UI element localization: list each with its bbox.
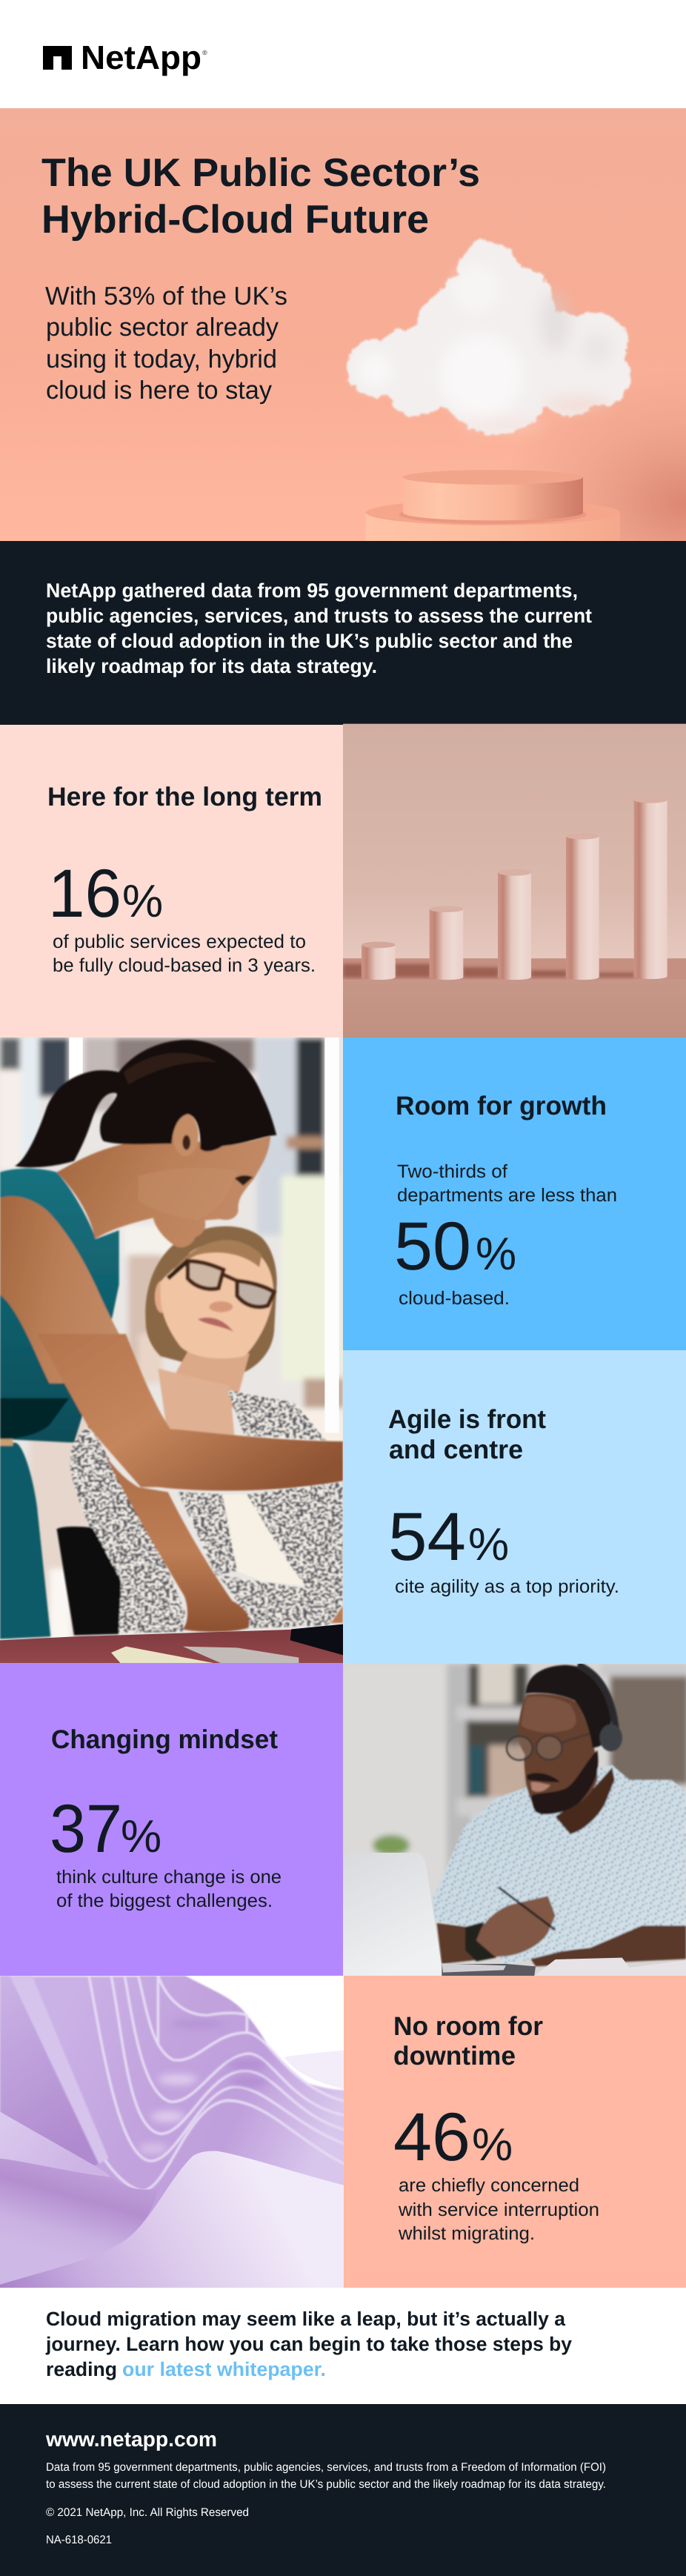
- stat: 37%: 37: [50, 1791, 122, 1867]
- stat: 50%: 50: [394, 1209, 471, 1284]
- stat: 16%: [48, 856, 163, 932]
- intro text: NetApp gathered data from 95 government departments,: [46, 580, 578, 602]
- title: Hybrid-Cloud Future: [41, 198, 429, 242]
- lead-in text: Two-thirds of: [397, 1161, 507, 1182]
- stat: 16%: %: [122, 876, 163, 927]
- caption: cloud-based.: [399, 1288, 510, 1309]
- shirt: [432, 1765, 686, 1966]
- illustration: abstract lilac waves: [0, 1976, 350, 2297]
- photo: man with headset at laptop: [336, 1656, 686, 1985]
- bar 4: [566, 833, 599, 980]
- stat: 54%: [388, 1499, 509, 1575]
- panel: footer: [0, 2404, 686, 2576]
- window background: [0, 1030, 350, 1677]
- intro text: [46, 580, 592, 677]
- hero subtitle: public sector already: [46, 313, 279, 342]
- caption: think culture change is one: [56, 1867, 282, 1888]
- caption: [398, 2175, 599, 2244]
- hero subtitle: using it today, hybrid: [46, 345, 277, 374]
- stat: 46%: [393, 2099, 513, 2175]
- heading: [388, 1404, 546, 1464]
- heading: downtime: [393, 2041, 516, 2071]
- standing woman arms: [0, 1196, 343, 1632]
- caption: of public services expected to: [53, 932, 306, 952]
- caption: cite agility as a top priority.: [395, 1576, 619, 1597]
- head with beard, glasses and headset: [507, 1665, 622, 1834]
- stat: 54%: %: [468, 1519, 509, 1570]
- standing woman dress: [0, 1169, 119, 1639]
- panel: changing mindset: [0, 1663, 343, 1976]
- hero subtitle: [45, 282, 287, 405]
- stat: 50%: [394, 1209, 516, 1284]
- caption: [53, 932, 316, 976]
- logo wordmark: ®: [202, 49, 207, 56]
- seated woman head: [145, 1226, 277, 1408]
- heading: Changing mindset: [51, 1724, 278, 1754]
- stat: 46%: %: [472, 2119, 513, 2171]
- stat: 37%: %: [121, 1811, 161, 1862]
- stat: 16%: 16: [48, 856, 121, 932]
- caption: whilst migrating.: [398, 2223, 535, 2244]
- call-to-action text: reading: [46, 2358, 117, 2380]
- lead-in text: [397, 1161, 617, 1206]
- stat: 37%: [50, 1791, 161, 1867]
- panel: here for the long term: [0, 725, 343, 1038]
- panel: hero: [0, 108, 686, 541]
- title: [41, 151, 480, 242]
- intro text: state of cloud adoption in the UK’s public sector and the: [46, 630, 573, 652]
- standing woman head and neck: [15, 1040, 276, 1247]
- call-to-action text: our latest whitepaper.: [122, 2358, 326, 2380]
- call-to-action text: journey. Learn how you can begin to take those steps by: [45, 2333, 572, 2355]
- desk and open notebook: [442, 1958, 686, 1976]
- call-to-action text: Cloud migration may seem like a leap, but it’s actually a: [46, 2308, 565, 2330]
- arms and hands: [437, 1888, 686, 1966]
- intro text: public agencies, services, and trusts to assess the current: [46, 605, 592, 627]
- lead-in text: departments are less than: [397, 1185, 617, 1206]
- bar 3: [498, 869, 531, 980]
- caption: are chiefly concerned: [399, 2175, 579, 2196]
- icon: NetApp logo mark: [43, 46, 72, 70]
- caption: of the biggest challenges.: [56, 1890, 273, 1911]
- copyright: © 2021 NetApp, Inc. All Rights Reserved: [46, 2506, 249, 2519]
- panel: agile is front and centre: [343, 1350, 686, 1664]
- hero subtitle: cloud is here to stay: [46, 376, 273, 405]
- heading: and centre: [389, 1435, 523, 1464]
- panel: room for growth: [343, 1038, 686, 1350]
- source note: to assess the current state of cloud adoption in the UK’s public sector and the likely roadmap for its data strategy.: [46, 2478, 606, 2491]
- source note: Data from 95 government departments, public agencies, services, and trusts from a Freedom of Information (FOI): [46, 2461, 606, 2474]
- heading: Here for the long term: [47, 782, 322, 811]
- seated woman jacket: [56, 1368, 343, 1636]
- panel: header: [0, 0, 686, 108]
- hero subtitle: With 53% of the UK’s: [45, 282, 287, 311]
- logo wordmark: NetApp: [81, 39, 202, 76]
- caption: with service interruption: [398, 2200, 599, 2220]
- stat: 50%: %: [476, 1229, 516, 1280]
- source note: [46, 2461, 606, 2491]
- website: www.netapp.com: [45, 2428, 217, 2451]
- illustration: pedestal: [366, 470, 620, 541]
- desk with phone, notebook and keyboard: [0, 1624, 343, 1664]
- intro text: likely roadmap for its data strategy.: [46, 655, 377, 677]
- bar 5: [634, 797, 667, 979]
- bar 2: [430, 906, 463, 980]
- heading: [393, 2011, 543, 2071]
- caption: [56, 1867, 282, 1911]
- illustration: rising cylinders bar chart: [343, 724, 686, 1038]
- panel: call to action: [0, 2288, 686, 2404]
- heading: Agile is front: [388, 1404, 546, 1434]
- stat: 54%: 54: [388, 1499, 466, 1575]
- heading: No room for: [393, 2011, 543, 2041]
- panel: no room for downtime: [344, 1976, 686, 2288]
- stat: 46%: 46: [393, 2099, 470, 2175]
- panel: intro: [0, 541, 686, 725]
- call-to-action text: [45, 2308, 572, 2380]
- title: The UK Public Sector’s: [41, 151, 480, 195]
- caption: be fully cloud-based in 3 years.: [53, 955, 316, 976]
- office background: [336, 1656, 686, 1985]
- document number: NA-618-0621: [46, 2534, 112, 2546]
- heading: Room for growth: [396, 1091, 607, 1121]
- laptop: [343, 1853, 443, 1976]
- bar 1: [362, 942, 396, 980]
- photo: two women at a desk: [0, 1030, 350, 1677]
- illustration: cloud: [347, 239, 630, 435]
